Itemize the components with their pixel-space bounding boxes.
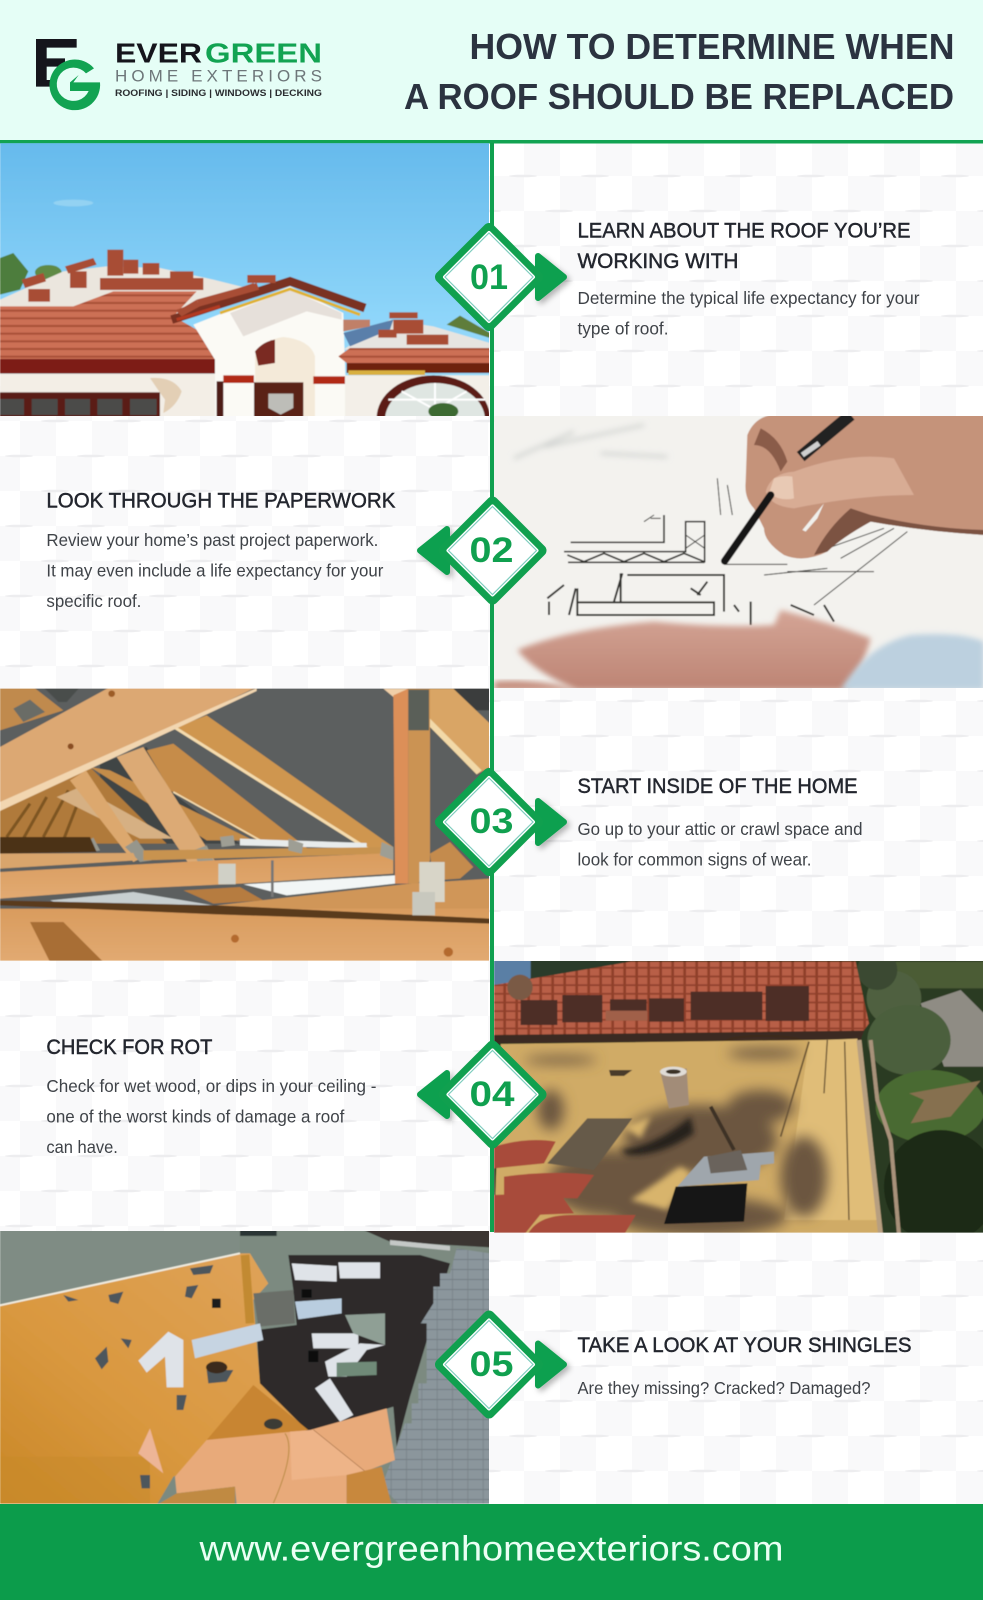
badge 03 with right arrow xyxy=(441,774,564,870)
number 03: 03 xyxy=(470,802,514,841)
step 3 heading: START INSIDE OF THE HOME xyxy=(578,775,858,798)
logo wordmark GREEN: GREEN xyxy=(205,38,322,68)
bottom plate xyxy=(0,909,490,962)
diamond xyxy=(444,1046,540,1142)
lower tiles xyxy=(494,1140,636,1235)
step 5 body: Are they missing? Cracked? Damaged? xyxy=(578,1378,871,1398)
arrow left xyxy=(420,1073,447,1116)
deck xyxy=(494,1039,880,1235)
step 4 body line 2: one of the worst kinds of damage a roof xyxy=(46,1106,345,1126)
gravel and shrubs xyxy=(921,990,983,1067)
step 5 heading: TAKE A LOOK AT YOUR SHINGLES xyxy=(578,1334,912,1357)
web members xyxy=(70,770,143,862)
blue sleeve xyxy=(841,634,983,690)
arrow right xyxy=(538,256,564,298)
torn felt xyxy=(909,1081,981,1123)
header green rule xyxy=(0,140,983,144)
step 2 body line 3: specific roof. xyxy=(46,591,141,611)
right diagonal xyxy=(430,689,490,774)
diamond xyxy=(441,1316,537,1412)
photo 4: stripped roof deck with stacked tiles xyxy=(494,950,983,1243)
vertical green timeline rule xyxy=(490,143,494,1232)
step 1 body line 1: Determine the typical life expectancy for your xyxy=(578,288,920,308)
dirt xyxy=(524,1048,827,1237)
step 4 body line 3: can have. xyxy=(46,1137,118,1157)
step 1 heading line 2: WORKING WITH xyxy=(578,250,738,273)
footer band xyxy=(0,1504,983,1600)
step 2 heading: LOOK THROUGH THE PAPERWORK xyxy=(46,490,395,512)
step 3 body line 1: Go up to your attic or crawl space and xyxy=(578,819,862,839)
photo 3: attic timber trusses xyxy=(0,687,490,962)
arrow right xyxy=(538,801,564,843)
arrow left xyxy=(420,529,447,572)
metal plates xyxy=(419,862,445,902)
lower blurred hand xyxy=(517,610,871,690)
sketch lines xyxy=(547,478,907,625)
diamond xyxy=(441,229,537,325)
roof tiles xyxy=(494,962,869,1037)
step 3 text xyxy=(578,775,862,870)
header band xyxy=(0,0,983,144)
logo wordmark EVER: EVER xyxy=(115,38,202,68)
title line 2: A ROOF SHOULD BE REPLACED xyxy=(404,76,954,117)
step 4 body line 1: Check for wet wood, or dips in your ceiling - xyxy=(46,1076,377,1096)
logo: Evergreen Home Exteriors xyxy=(36,38,322,110)
step 1 text xyxy=(578,220,920,338)
flashing and shadow xyxy=(664,1183,747,1224)
vertical post xyxy=(383,689,408,697)
black underlayment xyxy=(257,1255,450,1447)
step 1 heading: LEARN ABOUT THE ROOF YOU’RE xyxy=(578,220,910,242)
step 2 body line 2: It may even include a life expectancy for your xyxy=(46,560,384,580)
logo services line: ROOFING | SIDING | WINDOWS | DECKING xyxy=(115,88,322,99)
step 2 body line 1: Review your home’s past project paperwork. xyxy=(46,530,378,550)
diamond xyxy=(441,774,537,870)
writing hand xyxy=(745,415,983,558)
step 2 text xyxy=(46,490,395,611)
icon: EG monogram xyxy=(36,39,100,110)
vent pipe xyxy=(661,1068,689,1108)
step 4 heading: CHECK FOR ROT xyxy=(46,1036,213,1059)
new plywood xyxy=(207,1385,308,1440)
photo 1: house with tile roof under repair xyxy=(0,143,489,416)
arrow right xyxy=(538,1344,564,1386)
step 4 text xyxy=(46,1036,377,1157)
gutter edge xyxy=(859,1040,881,1235)
logo subtitle: HOME EXTERIORS xyxy=(115,67,322,86)
rafters xyxy=(147,744,310,850)
badge 05 with right arrow xyxy=(441,1316,564,1412)
loose shingle strips xyxy=(138,1262,385,1422)
title xyxy=(404,26,954,117)
badge 01 with right arrow xyxy=(441,229,564,325)
number 02: 02 xyxy=(470,531,514,570)
missing patches xyxy=(63,1265,233,1488)
badge 04 with left arrow xyxy=(420,1046,540,1142)
number 05: 05 xyxy=(470,1345,514,1384)
step 3 body line 2: look for common signs of wear. xyxy=(578,850,812,870)
photo 2: hand sketching a plan xyxy=(494,415,983,690)
step 1 body line 2: type of roof. xyxy=(578,318,668,338)
horizontal beams xyxy=(0,837,97,854)
footer url: www.evergreenhomeexteriors.com xyxy=(198,1530,784,1568)
far rafters xyxy=(0,767,167,844)
plywood xyxy=(0,1253,307,1505)
number 04: 04 xyxy=(470,1075,515,1114)
number 01: 01 xyxy=(470,258,508,297)
diamond xyxy=(444,502,540,598)
badge 02 with left arrow xyxy=(420,502,540,598)
tile stacks xyxy=(22,250,448,345)
title line 1: HOW TO DETERMINE WHEN xyxy=(470,26,954,67)
grey shingles xyxy=(382,1248,490,1505)
photo 5: aerial view of damaged shingle roof xyxy=(0,1230,490,1505)
big diagonal beam xyxy=(0,687,257,810)
step 5 text xyxy=(578,1334,912,1398)
